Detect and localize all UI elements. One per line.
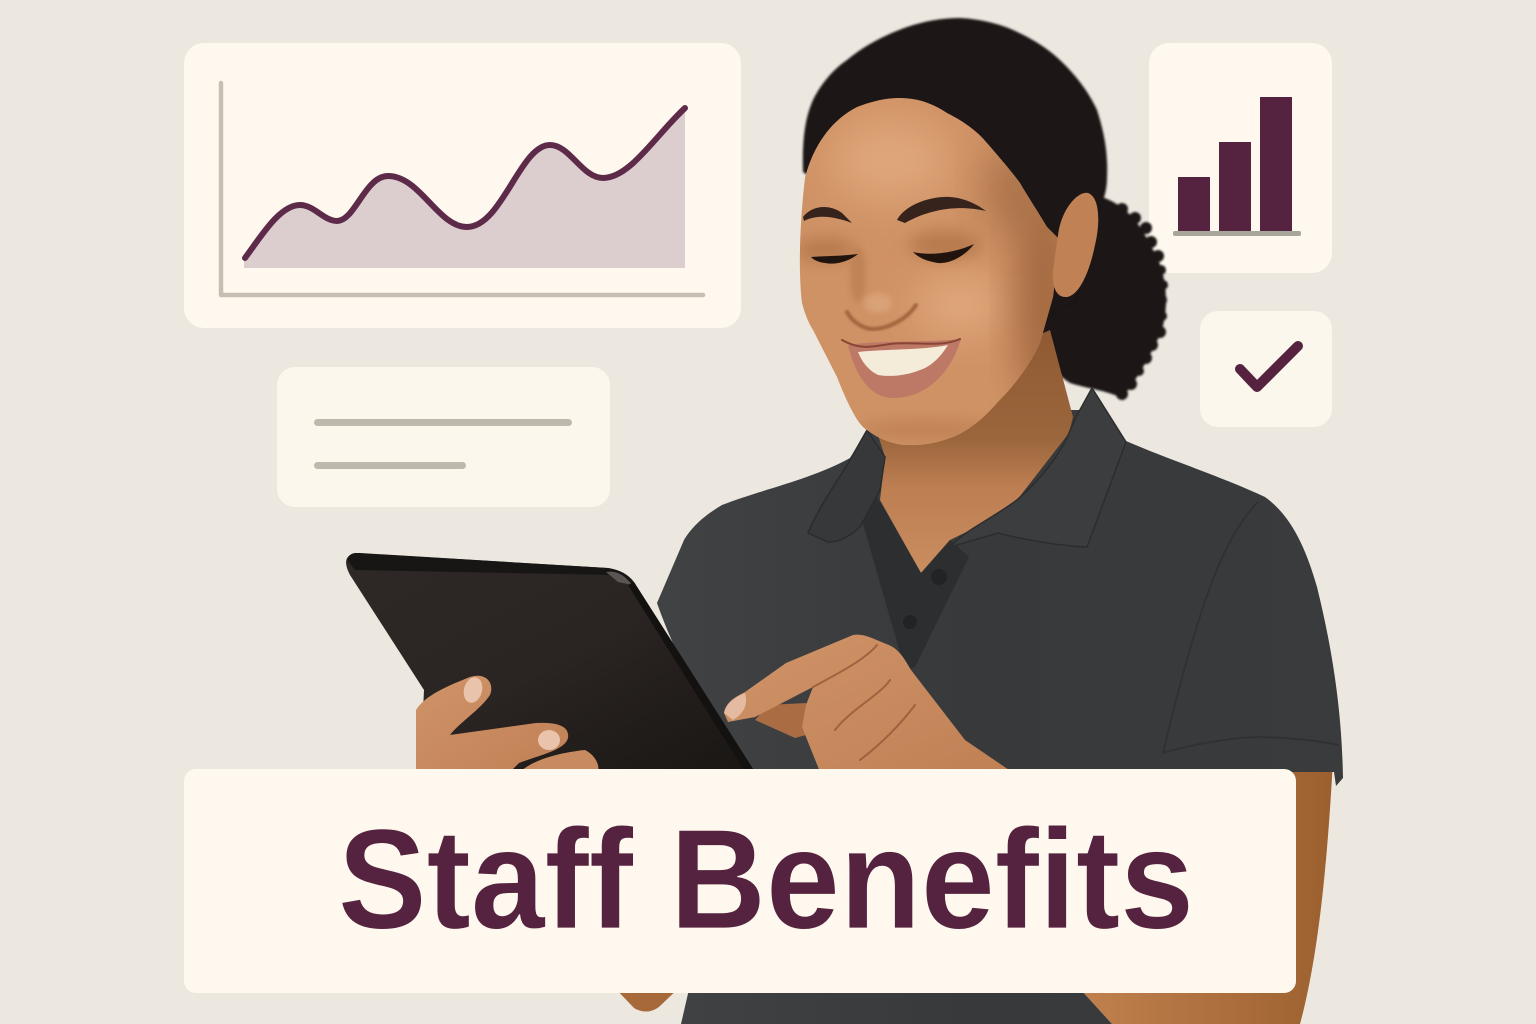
collar right: [950, 388, 1126, 547]
arm skin right: [1081, 760, 1333, 1024]
ponytail: [1039, 195, 1168, 400]
buttons: [903, 569, 947, 629]
face: [800, 98, 1058, 446]
mouth: [842, 339, 961, 398]
hair: [803, 18, 1107, 320]
eyes: [811, 244, 974, 264]
index nail: [538, 730, 560, 750]
neck: [870, 330, 1073, 573]
title banner: [184, 769, 1296, 993]
inner placket: [861, 495, 969, 670]
right hand: [724, 635, 1012, 772]
sleeve seam: [1163, 502, 1339, 753]
arm skin left lower: [612, 985, 682, 1012]
panel: text lines card: [277, 367, 610, 507]
thumb nail: [461, 675, 485, 705]
panel: check card: [1200, 311, 1332, 427]
icon: check mark: [1240, 346, 1298, 387]
person: [346, 18, 1343, 1024]
collar left: [808, 430, 885, 542]
eyebrows: [803, 197, 986, 223]
tablet: [346, 553, 755, 772]
chart axes: [221, 83, 703, 295]
chart line: [245, 108, 685, 258]
left hand: [416, 675, 598, 772]
chart area fill: [244, 108, 685, 268]
ear: [1053, 193, 1098, 297]
panel: area chart: [184, 43, 741, 328]
third finger: [520, 750, 598, 772]
title text: Staff Benefits: [338, 800, 1194, 959]
panel: bar chart card: [1149, 43, 1332, 273]
shirt: [657, 410, 1343, 1024]
bars: [1178, 97, 1292, 233]
nose: [847, 293, 916, 329]
